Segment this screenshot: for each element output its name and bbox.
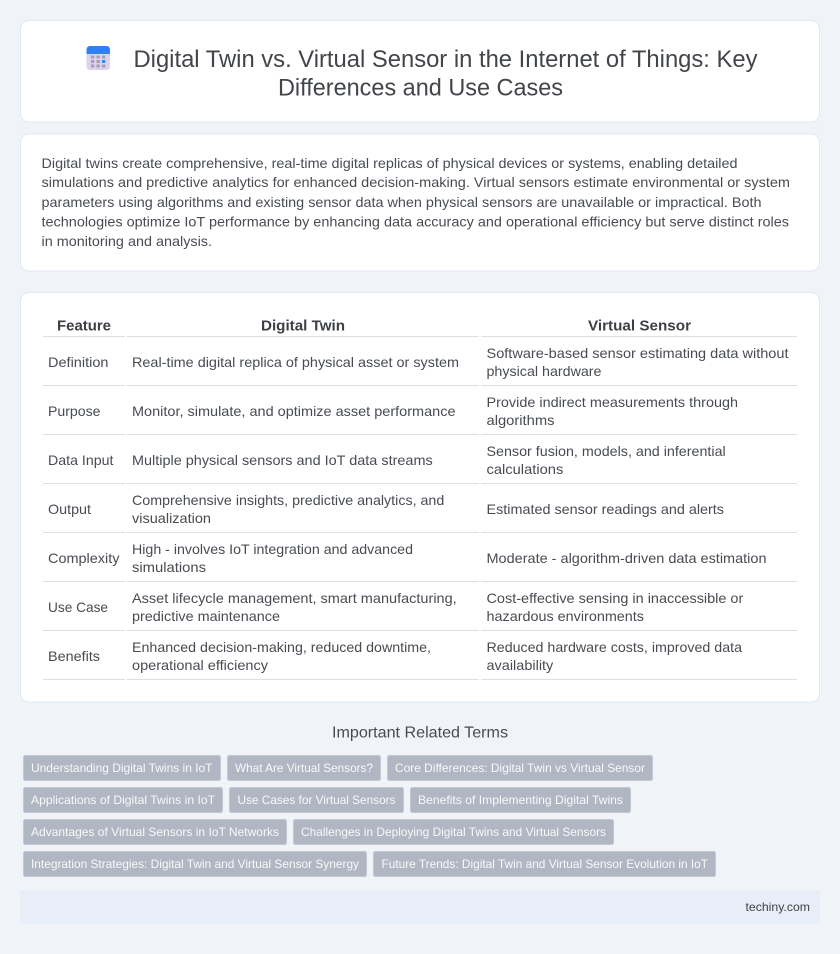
table row: use case: Use Case: [48, 599, 108, 615]
title: [134, 46, 758, 102]
table row: benefits: operational efficiency: [132, 657, 268, 673]
tag: [230, 788, 404, 812]
table row: definition: Real-time digital replica of physical asset or system: [132, 354, 459, 370]
tag: [24, 756, 220, 780]
tag: Use Cases for Virtual Sensors: [238, 793, 396, 807]
tag: What Are Virtual Sensors?: [235, 761, 373, 775]
table header: Feature: [57, 318, 111, 334]
footer: techiny.com: [746, 900, 810, 914]
tag: [24, 852, 366, 876]
title: Differences and Use Cases: [278, 74, 563, 102]
panel: comparison table: [20, 292, 820, 702]
tag: [294, 820, 614, 844]
table row: data input: Multiple physical sensors and IoT data streams: [132, 452, 433, 468]
table row: data input: [43, 443, 797, 484]
tag: [388, 756, 652, 780]
table header: Virtual Sensor: [588, 318, 691, 334]
tag: Applications of Digital Twins in IoT: [31, 793, 216, 807]
tag: Integration Strategies: Digital Twin and Virtual Sensor Synergy: [31, 857, 359, 871]
text block: introduction: [42, 155, 790, 249]
tag: Challenges in Deploying Digital Twins and Virtual Sensors: [301, 825, 606, 839]
table header: [43, 318, 797, 336]
tag: Future Trends: Digital Twin and Virtual Sensor Evolution in IoT: [382, 857, 709, 871]
table row: benefits: [43, 639, 797, 680]
table row: purpose: algorithms: [486, 412, 554, 428]
table row: purpose: Provide indirect measurements through: [486, 394, 738, 410]
tag: [374, 852, 716, 876]
tag: Understanding Digital Twins in IoT: [31, 761, 213, 775]
heading: important related terms: Important Related Terms: [332, 724, 508, 742]
table row: output: Estimated sensor readings and alerts: [486, 501, 724, 517]
table row: definition: Definition: [48, 354, 108, 370]
tag list: related terms: [24, 756, 716, 876]
table row: output: Output: [48, 501, 91, 517]
table row: definition: [43, 345, 797, 386]
table row: definition: Software-based sensor estimating data without: [486, 345, 789, 361]
table row: complexity: Complexity: [48, 550, 120, 566]
panel: header: [20, 20, 820, 122]
tag: [228, 756, 380, 780]
table row: complexity: High - involves IoT integration and advanced: [132, 541, 413, 557]
table row: use case: [43, 590, 797, 630]
table row: purpose: Monitor, simulate, and optimize asset performance: [132, 403, 456, 419]
table row: output: [43, 492, 797, 532]
tag: Core Differences: Digital Twin vs Virtual Sensor: [395, 761, 645, 775]
table header: Digital Twin: [261, 318, 345, 334]
text block: introduction: parameters using algorithms and existing sensor data when physical sensors are unavailable or impractical. Both: [42, 194, 762, 210]
table row: use case: Asset lifecycle management, smart manufacturing,: [132, 590, 457, 606]
table row: use case: Cost-effective sensing in inaccessible or: [486, 590, 744, 606]
table row: complexity: [43, 541, 797, 582]
tag: [24, 788, 222, 812]
table row: complexity: Moderate - algorithm-driven data estimation: [486, 550, 766, 566]
table row: benefits: Benefits: [48, 648, 100, 664]
tag: [410, 788, 630, 812]
table row: purpose: Purpose: [48, 403, 101, 419]
text block: introduction: in monitoring and analysis.: [42, 233, 212, 249]
table row: benefits: availability: [486, 657, 553, 673]
table row: data input: Sensor fusion, models, and inferential: [486, 443, 726, 459]
table row: complexity: simulations: [132, 559, 206, 575]
table row: purpose: [43, 394, 797, 434]
title: Digital Twin vs. Virtual Sensor in the Internet of Things: Key: [134, 46, 758, 73]
text block: introduction: simulations and predictive analytics for enhanced decision-making. Virtual sensors estimate environmental or system: [42, 174, 790, 190]
icon: calendar: [86, 46, 110, 70]
table row: benefits: Enhanced decision-making, reduced downtime,: [132, 639, 431, 655]
tag: Benefits of Implementing Digital Twins: [418, 793, 623, 807]
text block: introduction: Digital twins create comprehensive, real-time digital replicas of physical devices or systems, enabling detailed: [42, 155, 738, 171]
footer: [20, 890, 820, 924]
tag: Advantages of Virtual Sensors in IoT Networks: [31, 825, 279, 839]
table row: benefits: Reduced hardware costs, improved data: [486, 639, 742, 655]
table row: data input: Data Input: [48, 452, 114, 468]
text block: introduction: technologies optimize IoT performance by enhancing data accuracy and operational efficiency but serve distinct roles: [42, 214, 789, 230]
table row: output: Comprehensive insights, predictive analytics, and: [132, 492, 444, 508]
table row: definition: physical hardware: [486, 363, 602, 379]
panel: introduction: [20, 134, 820, 271]
table row: use case: predictive maintenance: [132, 608, 280, 624]
table row: output: visualization: [132, 510, 211, 526]
table row: use case: hazardous environments: [486, 608, 644, 624]
tag: [24, 820, 286, 844]
table row: data input: calculations: [486, 461, 563, 477]
